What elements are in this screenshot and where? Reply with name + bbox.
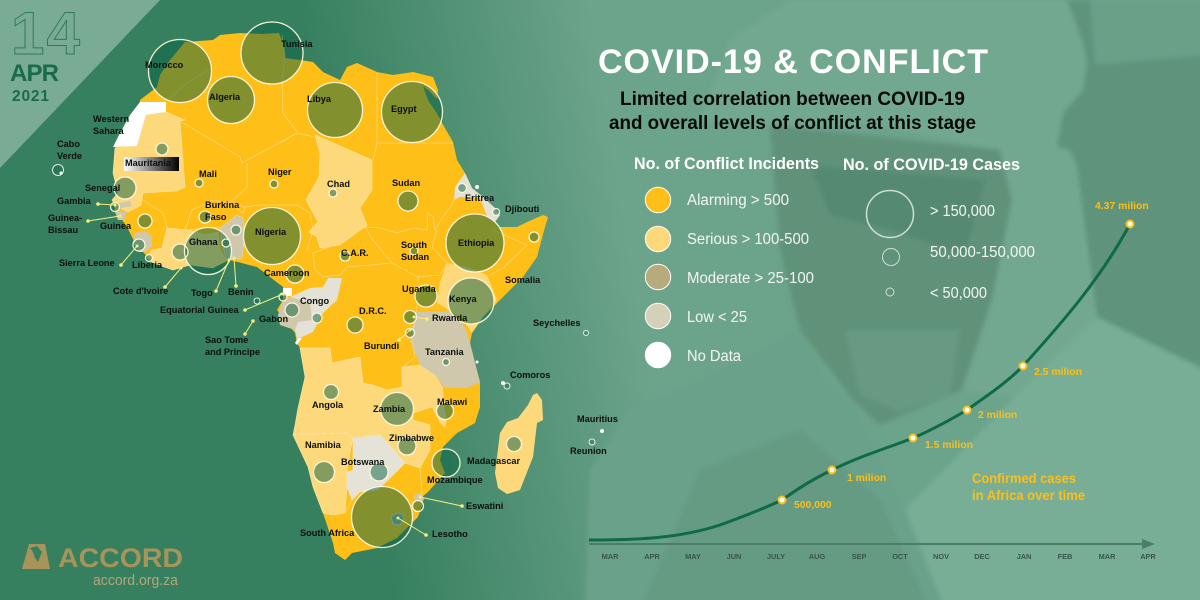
country labels: Senegal xyxy=(85,183,120,193)
country: Madagascar xyxy=(495,393,543,494)
background photo: health worker in protective gear xyxy=(585,0,1200,600)
country: Togo and Benin xyxy=(220,215,244,260)
country labels: Gabon xyxy=(259,314,288,324)
legend: conflict incidents: Low < 25 xyxy=(687,309,747,326)
country labels: Ghana xyxy=(189,237,218,247)
subtitle xyxy=(609,89,976,134)
month labels xyxy=(602,552,1156,561)
country labels: Mauritania xyxy=(125,158,172,168)
chart caption: Confirmed cases xyxy=(972,470,1076,486)
legend: conflict incidents: Alarming > 500 xyxy=(687,192,789,209)
curve value labels: 2 milion xyxy=(978,410,1017,421)
month labels: AUG xyxy=(809,552,825,561)
title: COVID-19 & CONFLICT xyxy=(598,43,988,81)
country labels: Liberia xyxy=(132,260,163,270)
legend: conflict incidents: Moderate > 25-100 xyxy=(687,270,814,287)
logo wordmark: ACCORD xyxy=(58,543,183,573)
logo: ACCORD xyxy=(22,543,183,589)
curve value labels: 4.37 milion xyxy=(1095,201,1149,212)
legend: conflict incidents: Serious > 100-500 xyxy=(687,231,809,248)
country labels: C.A.R. xyxy=(341,248,369,258)
country: Kenya xyxy=(437,263,497,333)
country labels: Mozambique xyxy=(427,475,483,485)
country: Lesotho xyxy=(391,513,404,525)
country labels: and Principe xyxy=(205,347,260,357)
country labels: Algeria xyxy=(209,92,241,102)
country labels: Ethiopia xyxy=(458,238,495,248)
country labels: Chad xyxy=(327,179,350,189)
country labels: Bissau xyxy=(48,225,78,235)
country labels: Benin xyxy=(228,287,254,297)
chart caption: in Africa over time xyxy=(972,487,1085,503)
month labels: APR xyxy=(644,552,660,561)
logo icon xyxy=(22,544,50,569)
logo url: accord.org.za xyxy=(93,572,179,589)
country labels: Eritrea xyxy=(465,193,495,203)
country: Congo xyxy=(290,278,342,338)
country: Namibia xyxy=(293,433,353,515)
sea: Red Sea notch xyxy=(423,86,445,122)
month labels: APR xyxy=(1140,552,1156,561)
leader lines xyxy=(86,202,464,537)
country: Cote d'Ivoire, Liberia, Ghana xyxy=(147,228,226,270)
country labels: Botswana xyxy=(341,457,385,467)
country labels: Verde xyxy=(57,151,82,161)
country labels: Cameroon xyxy=(264,268,310,278)
country: Guinea-Bissau xyxy=(115,212,127,220)
subtitle: and overall levels of conflict at this stage xyxy=(609,113,976,134)
base map alarming level xyxy=(112,33,548,560)
country labels xyxy=(48,39,618,539)
month labels: MAR xyxy=(602,552,619,561)
country: Cabinda xyxy=(295,338,302,345)
country labels: Eswatini xyxy=(466,501,503,511)
month labels: MAR xyxy=(1099,552,1116,561)
country labels: Niger xyxy=(268,167,292,177)
month labels: FEB xyxy=(1058,552,1072,561)
legend: COVID-19 cases: > 150,000 xyxy=(930,203,995,220)
country labels: Somalia xyxy=(505,275,541,285)
curve value labels xyxy=(794,201,1149,511)
country labels: Kenya xyxy=(449,294,477,304)
country labels: Guinea- xyxy=(48,213,82,223)
country: Eswatini xyxy=(414,493,424,503)
country labels: Gambia xyxy=(57,196,92,206)
legend heading: cases: No. of COVID-19 Cases xyxy=(843,156,1020,174)
country labels: Lesotho xyxy=(432,529,468,539)
month labels: DEC xyxy=(974,552,990,561)
country labels: Cabo xyxy=(57,139,80,149)
curve markers xyxy=(778,220,1134,504)
curve xyxy=(589,224,1130,540)
country labels: Togo xyxy=(191,288,213,298)
country labels: Burkina xyxy=(205,200,240,210)
chart caption xyxy=(972,470,1085,503)
country labels: Egypt xyxy=(391,104,417,114)
country labels: Congo xyxy=(300,296,329,306)
legend: COVID-19 cases: 50,000-150,000 xyxy=(930,244,1035,261)
country: Botswana xyxy=(347,435,405,500)
country: Gambia xyxy=(114,201,132,211)
legend: conflict incidents xyxy=(634,155,819,368)
country: Chad xyxy=(306,135,372,248)
country: Sierra Leone xyxy=(133,231,152,252)
map of Africa xyxy=(48,22,618,560)
country: Tanzania xyxy=(410,311,480,388)
Mauritania label background xyxy=(124,157,179,171)
subtitle: Limited correlation between COVID-19 xyxy=(620,89,965,110)
legend: conflict incidents: No Data xyxy=(687,348,741,365)
country labels: Seychelles xyxy=(533,318,581,328)
date day: 14 xyxy=(11,0,81,67)
country labels: Mauritius xyxy=(577,414,618,424)
country labels: Madagascar xyxy=(467,456,521,466)
month labels: SEP xyxy=(852,552,866,561)
legend: COVID-19 cases: < 50,000 xyxy=(930,285,987,302)
country labels: Faso xyxy=(205,212,227,222)
country labels: Sierra Leone xyxy=(59,258,115,268)
island dots xyxy=(60,172,604,433)
country labels: D.R.C. xyxy=(359,306,387,316)
curve value labels: 1.5 milion xyxy=(925,440,973,451)
country labels: Sudan xyxy=(401,252,429,262)
country: Equatorial Guinea xyxy=(283,288,292,296)
country: Gabon xyxy=(278,297,312,330)
country labels: Sahara xyxy=(93,126,125,136)
date month: APR xyxy=(10,60,59,87)
country labels: Equatorial Guinea xyxy=(160,305,240,315)
country labels: Angola xyxy=(312,400,344,410)
country labels: Uganda xyxy=(402,284,437,294)
country labels: Tanzania xyxy=(425,347,465,357)
country labels: Rwanda xyxy=(432,313,468,323)
country labels: Tunisia xyxy=(281,39,313,49)
chart axis xyxy=(589,539,1155,549)
country: Angola Zambia Zimbabwe Malawi region xyxy=(293,348,443,468)
month labels: JULY xyxy=(767,552,785,561)
curve value labels: 1 milion xyxy=(847,473,886,484)
curve value labels: 2.5 milion xyxy=(1034,367,1082,378)
legend heading: conflict: No. of Conflict Incidents xyxy=(634,155,819,173)
COVID-19 case circles xyxy=(52,22,595,548)
country labels: Reunion xyxy=(570,446,607,456)
date year: 2021 xyxy=(12,88,49,105)
month labels: NOV xyxy=(933,552,949,561)
country labels: South Africa xyxy=(300,528,355,538)
country labels: Nigeria xyxy=(255,227,287,237)
country: Mauritania and Senegal xyxy=(112,112,185,212)
country: Malawi xyxy=(432,375,447,428)
country: Eritrea and Djibouti xyxy=(454,173,500,222)
month labels: MAY xyxy=(685,552,701,561)
country borders xyxy=(143,35,527,513)
country labels: Comoros xyxy=(510,370,550,380)
country labels: Sudan xyxy=(392,178,420,188)
country labels: Namibia xyxy=(305,440,342,450)
country labels: Djibouti xyxy=(505,204,539,214)
date corner panel xyxy=(0,0,160,168)
line chart: confirmed cases over time xyxy=(589,201,1156,561)
country labels: South xyxy=(401,240,427,250)
country labels: Guinea xyxy=(100,221,132,231)
month labels: JUN xyxy=(727,552,741,561)
month labels: OCT xyxy=(892,552,908,561)
country labels: Burundi xyxy=(364,341,399,351)
country labels: Sao Tome xyxy=(205,335,248,345)
country labels: Morocco xyxy=(145,60,184,70)
month labels: JAN xyxy=(1017,552,1031,561)
country labels: Mali xyxy=(199,169,217,179)
country labels: Malawi xyxy=(437,397,467,407)
legend: COVID-19 cases xyxy=(843,156,1035,302)
country labels: Western xyxy=(93,114,129,124)
country labels: Cote d'Ivoire xyxy=(113,286,168,296)
country labels: Libya xyxy=(307,94,332,104)
country: Western Sahara xyxy=(113,102,166,147)
curve value labels: 500,000 xyxy=(794,500,832,511)
country labels: Zambia xyxy=(373,404,406,414)
country labels: Zimbabwe xyxy=(389,433,434,443)
